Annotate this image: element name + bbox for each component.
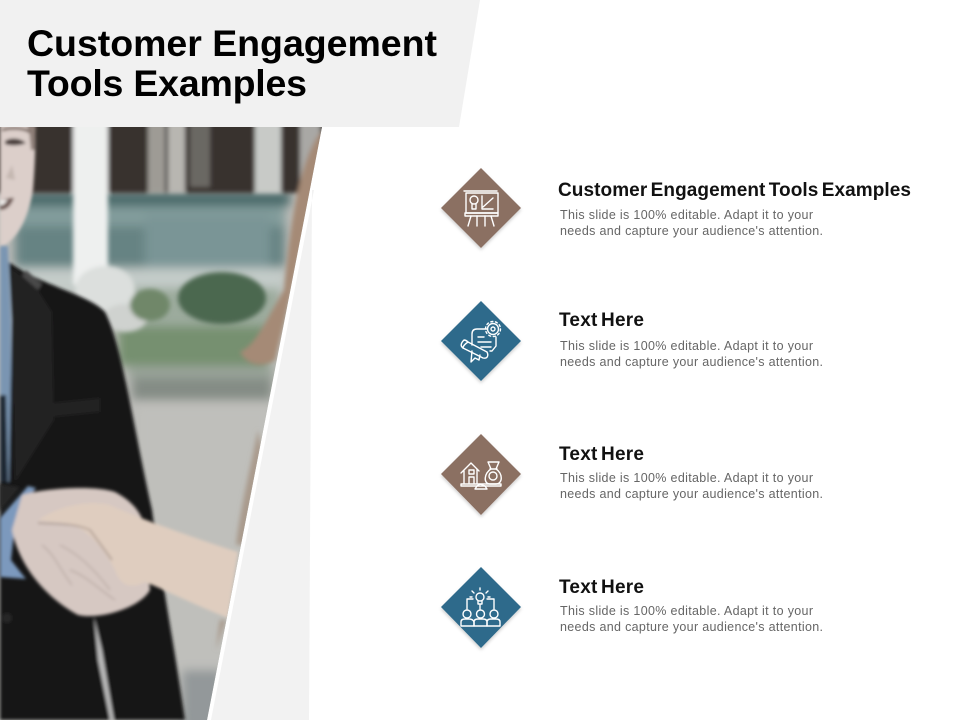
item 2 [441, 301, 823, 381]
panel: title background [0, 0, 480, 127]
description: This slide is 100% editable. Adapt it to your [560, 208, 813, 222]
icon: house and money bag on scale [461, 462, 501, 489]
photo: business handshake [0, 115, 330, 720]
description: This slide is 100% editable. Adapt it to your [560, 471, 813, 485]
heading: Text Here [559, 577, 644, 598]
item 1 [441, 168, 911, 248]
photo: suit and shirt [0, 246, 185, 720]
description: needs and capture your audience's attention. [560, 620, 823, 634]
diamond: brown [441, 168, 521, 248]
description: This slide is 100% editable. Adapt it to your [560, 604, 813, 618]
heading: Text Here [559, 444, 644, 465]
title: Tools Examples [27, 62, 307, 104]
description: This slide is 100% editable. Adapt it to your [560, 339, 813, 353]
title: Customer Engagement [27, 22, 438, 64]
description [560, 471, 823, 501]
panel: grey strip beside photo [211, 190, 314, 720]
diamond: blue [441, 567, 521, 648]
item 4 [441, 567, 823, 648]
diamond: brown [441, 434, 521, 515]
diamond: blue [441, 301, 521, 381]
description [560, 604, 823, 634]
heading: Text Here [559, 310, 644, 331]
icon: presentation board [464, 191, 498, 226]
description [560, 208, 823, 238]
description: needs and capture your audience's attention. [560, 224, 823, 238]
photo: man's face [0, 120, 36, 247]
description [560, 339, 823, 369]
icon: certificate and gear [461, 322, 500, 362]
description: needs and capture your audience's attention. [560, 355, 823, 369]
description: needs and capture your audience's attention. [560, 487, 823, 501]
title [27, 22, 438, 104]
item 3 [441, 434, 823, 515]
heading: Customer Engagement Tools Examples [558, 180, 911, 201]
icon: team with idea bulb [461, 588, 500, 626]
photo: shaking hands [0, 484, 238, 618]
